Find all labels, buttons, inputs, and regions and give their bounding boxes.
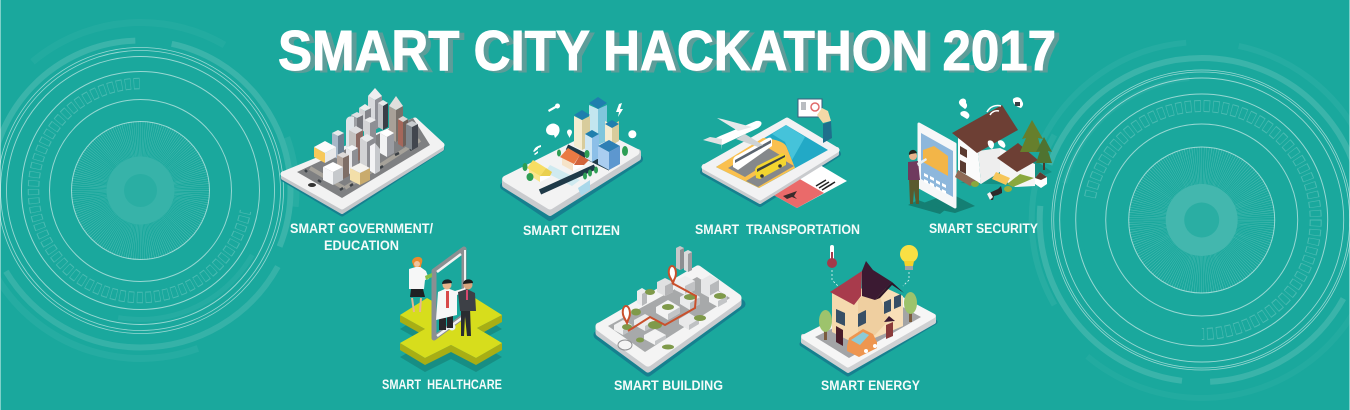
man	[908, 150, 927, 204]
woman	[409, 257, 432, 312]
title: SMART CITY HACKATHON 2017	[283, 21, 1061, 85]
label: smart citizen: SMART CITIZEN	[523, 223, 620, 238]
houses	[527, 148, 589, 182]
house	[830, 261, 904, 346]
buildings	[314, 88, 418, 185]
roads	[728, 146, 780, 177]
trees	[1020, 120, 1052, 170]
ticket	[770, 165, 847, 208]
illustration: smart citizen phone	[504, 97, 639, 217]
plane	[703, 118, 763, 150]
city blocks	[614, 246, 727, 345]
dog and bushes	[971, 181, 1012, 200]
label: smart government / education: EDUCATION	[324, 238, 399, 253]
decorative radial dial: left	[0, 22, 308, 358]
illustration: smart healthcare cross and phone	[400, 249, 502, 372]
illustration: smart transportation tablet	[703, 99, 847, 208]
illustration: smart energy house	[802, 245, 935, 374]
label: smart government / education	[290, 221, 433, 253]
phone frame	[434, 249, 465, 338]
illustration: smart government tablet city	[283, 88, 442, 214]
towers	[574, 97, 620, 170]
citizen icons	[533, 103, 636, 155]
illustration: smart building phone	[598, 246, 741, 372]
house	[952, 105, 1047, 188]
train	[733, 138, 772, 170]
car	[847, 329, 877, 357]
road	[540, 147, 610, 192]
label: smart government / education: SMART GOVERNMENT/	[290, 221, 433, 236]
title: SMART CITY HACKATHON 2017	[278, 19, 1056, 83]
label: smart security: SMART SECURITY	[929, 221, 1038, 236]
icon: light bulb	[900, 245, 918, 286]
decorative radial dial: right	[1024, 42, 1350, 398]
label: smart transportation: SMART TRANSPORTATION	[695, 222, 860, 237]
security icons	[959, 97, 1023, 149]
doctor	[436, 279, 465, 330]
red route and pins	[623, 266, 696, 331]
green roofs	[622, 289, 726, 350]
boarding card and hand	[798, 99, 832, 143]
bus	[755, 153, 786, 179]
label: smart building: SMART BUILDING	[614, 378, 723, 393]
phone	[919, 124, 955, 207]
trees	[819, 292, 917, 340]
label: smart energy: SMART ENERGY	[821, 378, 920, 393]
label: smart healthcare: SMART HEALTHCARE	[382, 377, 502, 392]
illustration: smart security phone and house	[908, 97, 1052, 214]
icon: thermometer	[827, 245, 838, 286]
businessman	[458, 279, 476, 336]
trees	[522, 146, 628, 181]
